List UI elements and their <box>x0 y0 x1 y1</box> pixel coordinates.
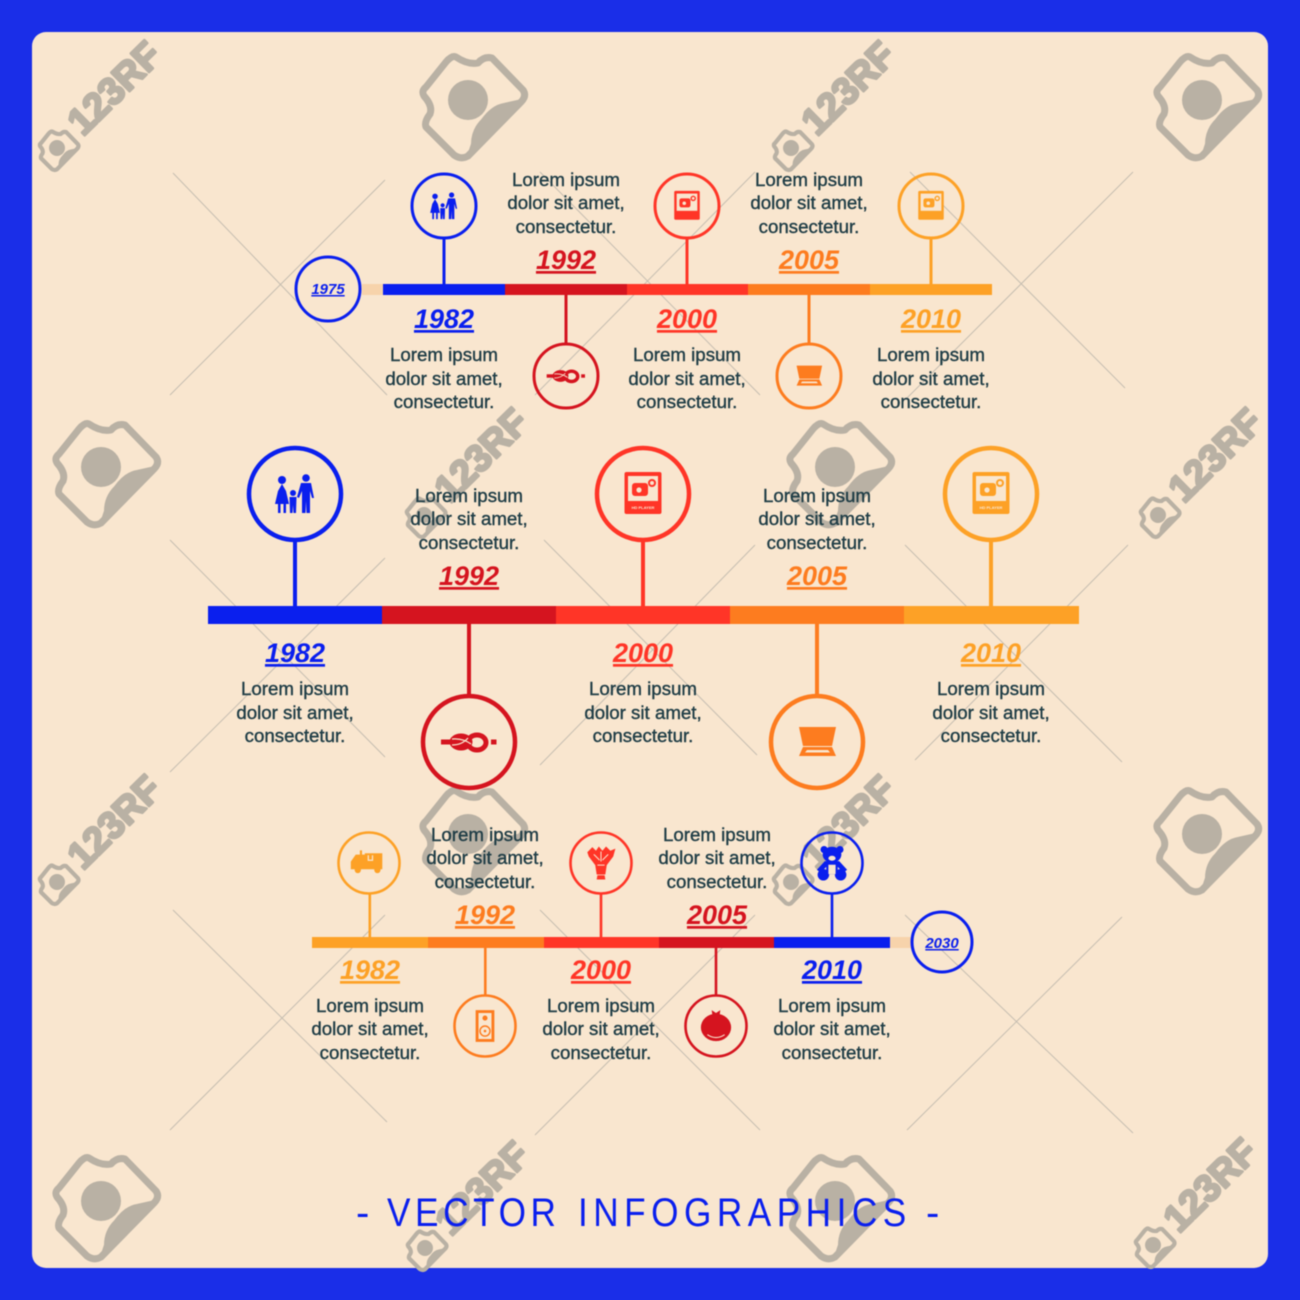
timeline: bottom <box>311 824 972 1063</box>
text 2005: consectetur. <box>767 532 867 553</box>
text 2000: Lorem ipsum <box>633 344 741 365</box>
milestone pin 2000: flowers icon <box>570 832 632 937</box>
text 2005 <box>758 485 876 553</box>
text 2005: dolor sit amet, <box>750 192 868 213</box>
text 1992 <box>507 169 625 237</box>
milestone pin 1992: knot icon <box>423 624 515 788</box>
milestone pin 2000: player card icon <box>655 174 719 284</box>
milestone pin 2010: teddy bear icon <box>802 832 862 937</box>
year 2000: 2000 <box>570 955 631 985</box>
text 2010: Lorem ipsum <box>937 678 1045 699</box>
milestone pin 1992: speaker icon <box>454 948 516 1056</box>
text 2010 <box>872 344 990 412</box>
milestone pin 2005: box icon <box>771 624 863 788</box>
text 2010 <box>932 678 1050 746</box>
title: VECTOR <box>387 1190 556 1234</box>
title: - <box>356 1191 369 1235</box>
year 2005: 2005 <box>778 245 840 275</box>
text 1992: dolor sit amet, <box>426 847 544 868</box>
year 1992: 1992 <box>455 900 515 930</box>
year 1992: 1992 <box>536 245 596 275</box>
text 2010: consectetur. <box>881 391 981 412</box>
title: - <box>926 1191 939 1235</box>
text 1982: dolor sit amet, <box>311 1018 429 1039</box>
text 2005 <box>750 169 868 237</box>
milestone pin 2010: card icon <box>899 174 963 284</box>
text 1992: consectetur. <box>435 871 535 892</box>
text 2010: consectetur. <box>941 725 1041 746</box>
title: INFOGRAPHICS <box>578 1190 906 1234</box>
text 2005 <box>658 824 776 892</box>
text 2005: consectetur. <box>667 871 767 892</box>
text 1982: Lorem ipsum <box>241 678 349 699</box>
timeline: top <box>296 169 992 412</box>
text 1992: dolor sit amet, <box>507 192 625 213</box>
text 2000: consectetur. <box>637 391 737 412</box>
year 1982: 1982 <box>414 304 474 334</box>
text 2000: consectetur. <box>593 725 693 746</box>
year 2000: 2000 <box>656 304 717 334</box>
watermark pattern: 123RF <box>794 768 904 877</box>
text 1992: consectetur. <box>516 216 616 237</box>
milestone pin 2010: card icon <box>945 448 1037 606</box>
text 2010: consectetur. <box>782 1042 882 1063</box>
year 2010: 2010 <box>801 955 862 985</box>
text 1992: Lorem ipsum <box>415 485 523 506</box>
text 2005: Lorem ipsum <box>663 824 771 845</box>
milestone pin 1992: knot icon <box>534 295 598 408</box>
text 1982: Lorem ipsum <box>316 995 424 1016</box>
text 2010: Lorem ipsum <box>877 344 985 365</box>
text 2005: Lorem ipsum <box>763 485 871 506</box>
year 1982: 1982 <box>340 955 400 985</box>
year 1992: 1992 <box>439 561 499 591</box>
watermark pattern: 123RF <box>427 401 537 510</box>
text 2000 <box>584 678 702 746</box>
text 2010: Lorem ipsum <box>778 995 886 1016</box>
title <box>356 1190 939 1235</box>
watermark pattern: 123RF <box>428 1134 538 1243</box>
text 2010: dolor sit amet, <box>773 1018 891 1039</box>
text 1992: consectetur. <box>419 532 519 553</box>
text 2005: dolor sit amet, <box>658 847 776 868</box>
text 2000 <box>542 995 660 1063</box>
milestone pin 1982: family icon <box>249 448 341 606</box>
text 2000: dolor sit amet, <box>628 368 746 389</box>
watermark pattern: 123RF <box>60 768 170 877</box>
text 2000 <box>628 344 746 412</box>
watermark pattern: 123RF <box>1156 1131 1266 1240</box>
text 1992: Lorem ipsum <box>431 824 539 845</box>
milestone pin 1982: truck icon <box>338 832 400 937</box>
end marker 2030 <box>890 912 972 972</box>
text 1982: dolor sit amet, <box>385 368 503 389</box>
year 2005: 2005 <box>686 900 748 930</box>
text 1992 <box>410 485 528 553</box>
text 1982 <box>385 344 503 412</box>
text 1992: Lorem ipsum <box>512 169 620 190</box>
timeline: middle <box>208 448 1079 788</box>
end marker 2030: 2030 <box>924 935 959 952</box>
text 2000: dolor sit amet, <box>542 1018 660 1039</box>
text 1982: consectetur. <box>394 391 494 412</box>
start marker 1975 <box>296 257 383 321</box>
milestone pin 2000: player card icon <box>597 448 689 606</box>
year 2010: 2010 <box>900 304 961 334</box>
text 1992: dolor sit amet, <box>410 508 528 529</box>
segmented bar <box>312 937 890 948</box>
text 1982: Lorem ipsum <box>390 344 498 365</box>
text 2005: consectetur. <box>759 216 859 237</box>
text 1982: dolor sit amet, <box>236 702 354 723</box>
text 1982 <box>311 995 429 1063</box>
text 2000: Lorem ipsum <box>547 995 655 1016</box>
text 1982: consectetur. <box>320 1042 420 1063</box>
text 2005: dolor sit amet, <box>758 508 876 529</box>
watermark pattern: 123RF <box>1161 401 1271 510</box>
milestone pin 1982: family icon <box>412 174 476 284</box>
text 1982: consectetur. <box>245 725 345 746</box>
text 1982 <box>236 678 354 746</box>
segmented bar <box>208 606 1079 624</box>
year 2005: 2005 <box>786 561 848 591</box>
text 2000: dolor sit amet, <box>584 702 702 723</box>
milestone pin 2000: player card icon: HD PLAYER <box>632 505 654 510</box>
year 2000: 2000 <box>612 638 673 668</box>
text 2000: consectetur. <box>551 1042 651 1063</box>
text 2010: dolor sit amet, <box>932 702 1050 723</box>
milestone pin 2005: box icon <box>777 295 841 408</box>
year 2010: 2010 <box>960 638 1021 668</box>
text 1992 <box>426 824 544 892</box>
text 2010 <box>773 995 891 1063</box>
text 2005: Lorem ipsum <box>755 169 863 190</box>
text 2000: Lorem ipsum <box>589 678 697 699</box>
watermark pattern: 123RF <box>60 34 170 143</box>
segmented bar <box>383 284 992 295</box>
watermark pattern: 123RF <box>794 34 904 143</box>
milestone pin 2005: fruit icon <box>686 948 746 1056</box>
year 1982: 1982 <box>265 638 325 668</box>
milestone pin 2010: card icon: HD PLAYER <box>980 505 1002 510</box>
text 2010: dolor sit amet, <box>872 368 990 389</box>
start marker 1975: 1975 <box>311 281 345 298</box>
